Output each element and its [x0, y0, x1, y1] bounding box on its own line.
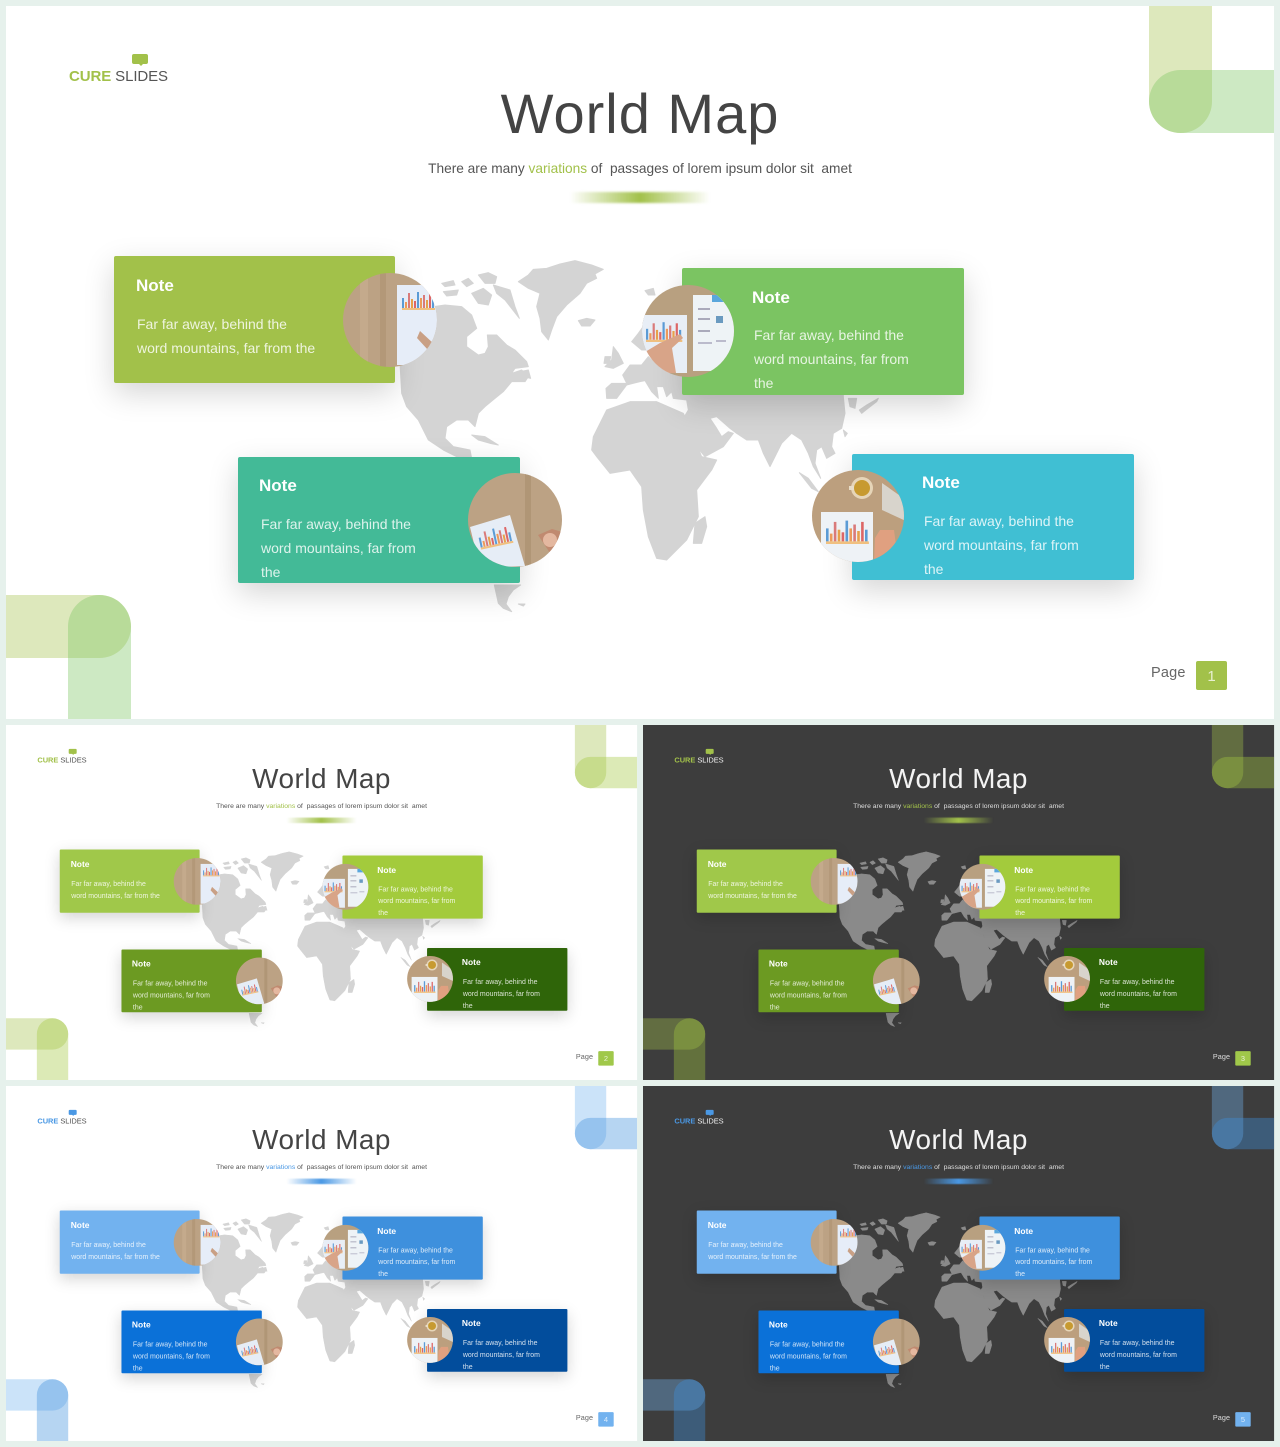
logo	[674, 1110, 724, 1125]
note 3: Note	[769, 1320, 788, 1329]
note 2: the	[378, 1270, 388, 1278]
page number	[1213, 1412, 1251, 1427]
note 2: Far far away, behind the	[378, 1246, 453, 1254]
note 3: the	[133, 1364, 143, 1372]
subtitle: There are many variations of passages of lorem ipsum dolor sit amet	[853, 802, 1064, 810]
page number: Page	[576, 1414, 593, 1422]
note 1: Note	[71, 1220, 90, 1230]
note 2: Far far away, behind the	[378, 885, 453, 893]
note 4: Note	[922, 473, 960, 492]
note 4: word mountains, far from	[1100, 1350, 1177, 1358]
note 3: Note	[132, 1320, 151, 1329]
logo	[69, 54, 168, 85]
note 1	[114, 256, 395, 383]
note 3: word mountains, far from	[133, 991, 210, 999]
note 3: word mountains, far from	[770, 991, 847, 999]
page number	[576, 1412, 614, 1427]
subtitle: There are many variations of passages of lorem ipsum dolor sit amet	[216, 802, 427, 810]
note 1: Far far away, behind the	[137, 316, 287, 332]
note 2	[342, 855, 483, 919]
note 1	[697, 849, 837, 913]
note 4	[852, 454, 1134, 580]
page number: Page	[1213, 1053, 1230, 1061]
page number: Page	[1151, 665, 1186, 681]
note 3: Far far away, behind the	[133, 1340, 208, 1348]
note 4: Note	[462, 1319, 481, 1328]
note 3: Far far away, behind the	[770, 1340, 845, 1348]
page number	[1151, 661, 1227, 690]
note 2: word mountains, far from	[754, 351, 909, 367]
logo: CURE SLIDES	[674, 1117, 724, 1125]
photo circles	[174, 858, 453, 1004]
note 2: Note	[377, 865, 396, 875]
note 3: Far far away, behind the	[261, 516, 411, 532]
logo: CURE SLIDES	[674, 756, 724, 764]
note 4: word mountains, far from	[463, 1350, 540, 1358]
note 4: Far far away, behind the	[924, 513, 1074, 529]
logo	[37, 748, 87, 764]
page number	[1213, 1051, 1251, 1066]
note 2: Far far away, behind the	[1015, 885, 1090, 893]
note 1	[60, 1210, 200, 1274]
note 4: Note	[1099, 958, 1118, 967]
world map	[400, 260, 879, 612]
photo circles	[810, 858, 1090, 1004]
note 1: Far far away, behind the	[708, 879, 783, 887]
logo	[37, 1110, 87, 1125]
note 1: word mountains, far from the	[71, 1252, 160, 1260]
note 2: word mountains, far from	[378, 1258, 455, 1266]
note 1: Note	[708, 859, 727, 869]
slide 5: blue dark	[643, 1086, 1274, 1441]
title: World Map	[889, 763, 1028, 794]
note 3: word mountains, far from	[133, 1352, 210, 1360]
subtitle: There are many variations of passages of lorem ipsum dolor sit amet	[428, 161, 852, 176]
note 4	[1064, 948, 1204, 1011]
gradient divider	[287, 1179, 356, 1184]
subtitle: There are many variations of passages of lorem ipsum dolor sit amet	[853, 1163, 1064, 1171]
note 3	[758, 950, 899, 1012]
note 1: Note	[136, 276, 174, 295]
title: World Map	[501, 82, 779, 145]
note 1	[60, 849, 200, 913]
note 1: Far far away, behind the	[708, 1240, 783, 1248]
gradient divider	[570, 192, 710, 203]
page number	[576, 1051, 614, 1066]
photo circles	[343, 273, 904, 567]
page number: Page	[1213, 1414, 1230, 1422]
subtitle: There are many variations of passages of lorem ipsum dolor sit amet	[216, 1163, 427, 1171]
note 2: Note	[377, 1226, 396, 1236]
note 2: word mountains, far from	[1015, 1258, 1092, 1266]
world map	[202, 852, 440, 1027]
note 3: Far far away, behind the	[133, 979, 208, 987]
note 1: Note	[71, 859, 90, 869]
note 3	[238, 457, 520, 583]
note 4: the	[463, 1362, 473, 1370]
note 3	[758, 1311, 899, 1373]
note 3: the	[261, 564, 280, 580]
note 3: Far far away, behind the	[770, 979, 845, 987]
note 4	[427, 1309, 567, 1372]
note 1: word mountains, far from the	[137, 340, 315, 356]
title: World Map	[252, 1124, 391, 1155]
logo: CURE SLIDES	[69, 68, 168, 85]
page number: 1	[1207, 668, 1216, 685]
note 2: Note	[1014, 1226, 1033, 1236]
note 2: Note	[752, 288, 790, 307]
note 4: the	[1100, 1362, 1110, 1370]
note 4: the	[924, 561, 943, 577]
note 1: word mountains, far from the	[708, 1252, 797, 1260]
note 1: word mountains, far from the	[71, 891, 160, 899]
title: World Map	[889, 1124, 1028, 1155]
logo: CURE SLIDES	[37, 756, 87, 764]
page number: 5	[1241, 1416, 1245, 1424]
note 1: Note	[708, 1220, 727, 1230]
note 3: word mountains, far from	[770, 1352, 847, 1360]
note 2	[979, 1216, 1120, 1280]
note 2	[682, 268, 964, 395]
note 2: the	[378, 909, 388, 917]
note 4: Far far away, behind the	[1100, 1338, 1175, 1346]
note 2: Note	[1014, 865, 1033, 875]
note 4: Far far away, behind the	[1100, 977, 1175, 985]
note 3	[121, 1311, 262, 1373]
photo circles	[810, 1219, 1090, 1366]
note 2: word mountains, far from	[1015, 897, 1092, 905]
note 4: Note	[462, 958, 481, 967]
page number: 3	[1241, 1055, 1245, 1063]
note 2: the	[1015, 1270, 1025, 1278]
note 3: word mountains, far from	[261, 540, 416, 556]
note 2	[342, 1216, 483, 1280]
note 4: Far far away, behind the	[463, 977, 538, 985]
photo circles	[174, 1219, 453, 1366]
note 2: the	[1015, 909, 1025, 917]
world map	[839, 1212, 1078, 1388]
page number: 4	[604, 1416, 608, 1424]
note 2: word mountains, far from	[378, 897, 455, 905]
note 4: Far far away, behind the	[463, 1338, 538, 1346]
note 2: Far far away, behind the	[1015, 1246, 1090, 1254]
note 3: Note	[259, 476, 297, 495]
note 4: the	[1100, 1001, 1110, 1009]
note 1	[697, 1210, 837, 1274]
slide 3: green dark	[643, 725, 1274, 1080]
title: World Map	[252, 763, 391, 794]
note 3: Note	[132, 959, 151, 968]
page number: Page	[576, 1053, 593, 1061]
page number: 2	[604, 1055, 608, 1063]
note 3: Note	[769, 959, 788, 968]
logo	[674, 748, 724, 764]
logo: CURE SLIDES	[37, 1117, 87, 1125]
note 4: the	[463, 1001, 473, 1009]
gradient divider	[924, 1179, 993, 1184]
world map	[202, 1212, 440, 1388]
note 3: the	[770, 1364, 780, 1372]
note 4	[427, 948, 567, 1011]
note 4	[1064, 1309, 1204, 1372]
note 1: word mountains, far from the	[708, 891, 797, 899]
note 2	[979, 855, 1120, 919]
gradient divider	[924, 818, 993, 823]
note 4: word mountains, far from	[924, 537, 1079, 553]
note 4: word mountains, far from	[1100, 989, 1177, 997]
note 3: the	[133, 1003, 143, 1011]
note 3	[121, 950, 262, 1012]
note 2: the	[754, 375, 773, 391]
note 1: Far far away, behind the	[71, 879, 146, 887]
gradient divider	[287, 818, 356, 823]
world map	[839, 852, 1078, 1027]
slide 4: blue light	[6, 1086, 637, 1441]
note 2: Far far away, behind the	[754, 327, 904, 343]
note 4: Note	[1099, 1319, 1118, 1328]
slide 2: green light	[6, 725, 637, 1080]
note 4: word mountains, far from	[463, 989, 540, 997]
note 1: Far far away, behind the	[71, 1240, 146, 1248]
slide 1: main green	[6, 6, 1274, 719]
note 3: the	[770, 1003, 780, 1011]
